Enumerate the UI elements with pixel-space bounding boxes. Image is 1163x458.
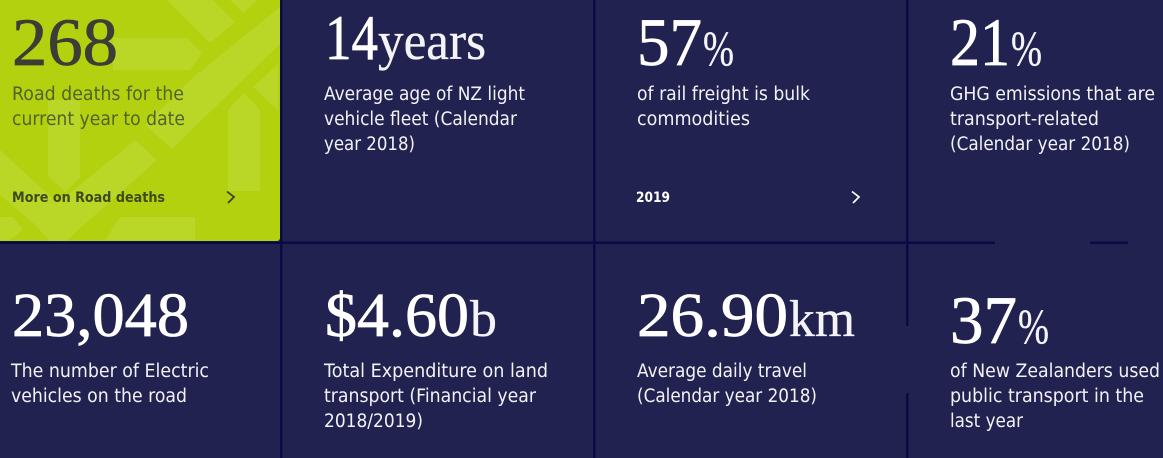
text: expenditure description: Total Expenditure on land [323,361,548,382]
text: expenditure description: 2018/2019) [324,411,423,432]
statistic: 23,048: 23,048 [12,282,189,350]
panel: GHG emissions: % [1011,20,1042,76]
text: fleet age description: vehicle fleet (Calendar [324,109,517,130]
panel: public transport [950,282,1160,432]
panel: daily travel [637,282,855,407]
text: GHG description: GHG emissions that are [950,84,1155,105]
text: fleet age description: year 2018) [324,134,415,155]
text: daily travel description: Average daily travel [637,361,807,382]
text: EV description: vehicles on the road [11,386,187,407]
green card road pattern [0,0,280,241]
text: fleet age description: Average age of NZ light [324,84,525,105]
panel: electric vehicles [10,282,209,407]
icon: chevron [227,192,234,203]
panel: land transport expenditure: b [470,291,497,348]
statistic: 37%: 37 [950,282,1017,358]
panel: GHG emissions [950,4,1155,155]
link: more on road deaths: More on Road deaths [12,190,165,206]
link: 2019: 2019 [636,190,670,206]
statistic: 21%: 21 [950,4,1010,80]
panel: road deaths [0,0,280,241]
statistic: $4.60b: $4.60 [325,282,469,350]
text: road deaths description: current year to date [12,109,185,130]
statistic: 26.90km: 26.90 [637,282,788,350]
text: rail freight description: of rail freight is bulk [637,84,810,105]
text: daily travel description: (Calendar year 2018) [637,386,817,407]
text: GHG description: (Calendar year 2018) [950,134,1130,155]
panel: fleet age: years [378,11,486,71]
text: expenditure description: transport (Financial year [324,386,536,407]
statistic: 14 years: 14 [325,2,378,73]
panel: fleet age [324,2,525,155]
statistic: 268: 268 [12,4,118,80]
icon: chevron [852,192,859,203]
text: public transport description: public transport in the [950,386,1144,407]
text: EV description: The number of Electric [10,361,209,382]
text: rail freight description: commodities [637,109,750,130]
panel: public transport: % [1018,298,1049,354]
text: road deaths description: Road deaths for the [12,84,184,105]
panel: daily travel: km [789,291,855,348]
statistic: 57%: 57 [637,4,702,80]
text: public transport description: last year [950,411,1023,432]
text: GHG description: transport-related [950,109,1099,130]
panel: rail freight [636,4,859,206]
panel: rail freight: % [703,20,734,76]
panel: land transport expenditure [323,282,548,432]
